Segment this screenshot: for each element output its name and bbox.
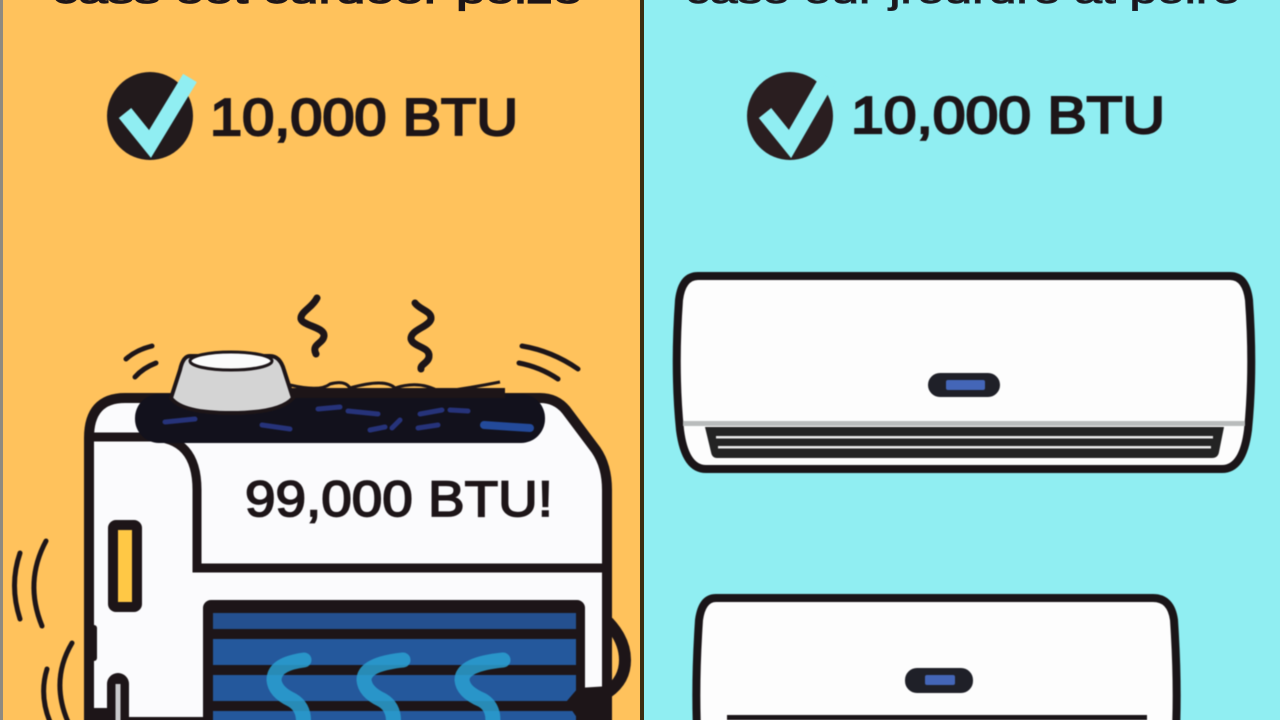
icon: check badge right xyxy=(747,72,833,160)
lower handle xyxy=(84,684,118,720)
knob xyxy=(171,352,293,413)
blue vent grille xyxy=(203,600,585,720)
unit body xyxy=(89,398,607,720)
upper display panel xyxy=(93,437,605,568)
yellow slot xyxy=(113,525,137,607)
label: left 10,000 BTU: 10,000 BTU xyxy=(210,89,518,147)
status display xyxy=(905,668,973,693)
side clamp xyxy=(566,622,625,720)
heat squiggles xyxy=(301,298,431,369)
status display xyxy=(928,373,1000,397)
vibration marks xyxy=(14,346,578,720)
vent xyxy=(705,427,1224,458)
label: right 10,000 BTU: 10,000 BTU xyxy=(851,87,1165,145)
illustration: wall AC unit, large xyxy=(677,276,1251,469)
icon: check badge left xyxy=(107,72,193,160)
illustration: wall AC unit, small xyxy=(696,598,1177,720)
panel: right cyan xyxy=(640,0,1280,720)
heat waves xyxy=(274,660,503,720)
panel: left orange xyxy=(0,0,641,720)
body side bump xyxy=(88,625,97,661)
vent xyxy=(727,715,1147,720)
illustration: overloaded portable unit xyxy=(14,298,625,720)
label: 99,000 BTU!: 99,000 BTU! xyxy=(245,471,553,527)
fan strip xyxy=(135,382,545,443)
